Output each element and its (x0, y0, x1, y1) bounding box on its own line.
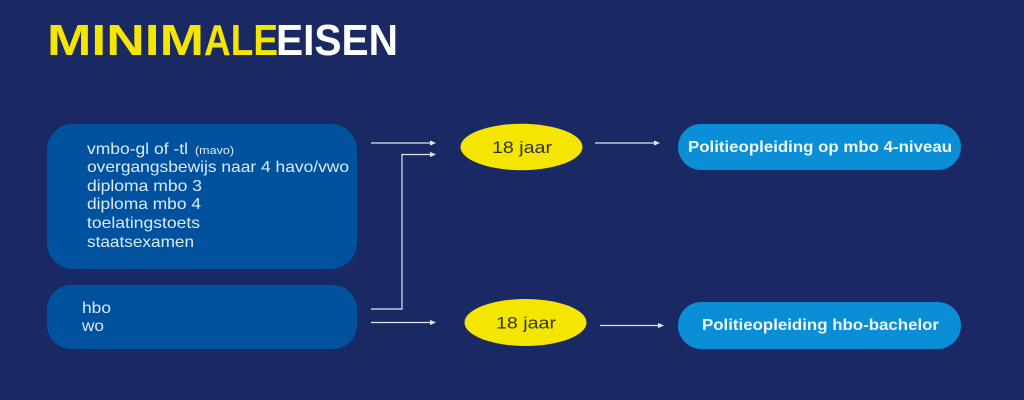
panel: hbo and wo entry requirements (47, 285, 357, 349)
arrow: upper panel to upper age (371, 140, 436, 146)
list of diplomas: (mavo) (195, 145, 234, 157)
pill: mbo programme: Politieopleiding op mbo 4-niveau (688, 139, 952, 156)
list of diplomas: diploma mbo 3 (87, 178, 202, 195)
panel: hbo and wo entry requirements: hbo (82, 300, 111, 317)
list of diplomas (87, 141, 349, 251)
pill: mbo programme (678, 124, 961, 170)
pill: hbo programme (678, 302, 961, 349)
arrow: lower panel elbow to upper age (371, 152, 436, 309)
list of diplomas: toelatingstoets (87, 215, 200, 232)
title: ALE (204, 16, 278, 65)
age badge: lower (464, 299, 586, 346)
arrow: lower age to hbo programme (600, 323, 664, 328)
title (47, 16, 398, 65)
age badge: upper (460, 124, 582, 170)
list of diplomas: vmbo-gl of -tl (87, 141, 188, 158)
list of diplomas: diploma mbo 4 (87, 196, 201, 213)
age badge: upper: 18 jaar (492, 138, 552, 157)
panel: hbo and wo entry requirements: wo (81, 318, 104, 335)
arrow: upper age to mbo programme (595, 140, 660, 146)
arrow: lower panel to lower age (371, 320, 436, 325)
age badge: lower: 18 jaar (496, 314, 556, 332)
pill: hbo programme: Politieopleiding hbo-bachelor (702, 317, 939, 334)
title: EISEN (276, 16, 398, 65)
list of diplomas: staatsexamen (87, 234, 194, 251)
list of diplomas: overgangsbewijs naar 4 havo/vwo (87, 159, 349, 176)
panel: vmbo and mbo entry requirements (47, 124, 357, 269)
title: MINIM (47, 16, 204, 65)
